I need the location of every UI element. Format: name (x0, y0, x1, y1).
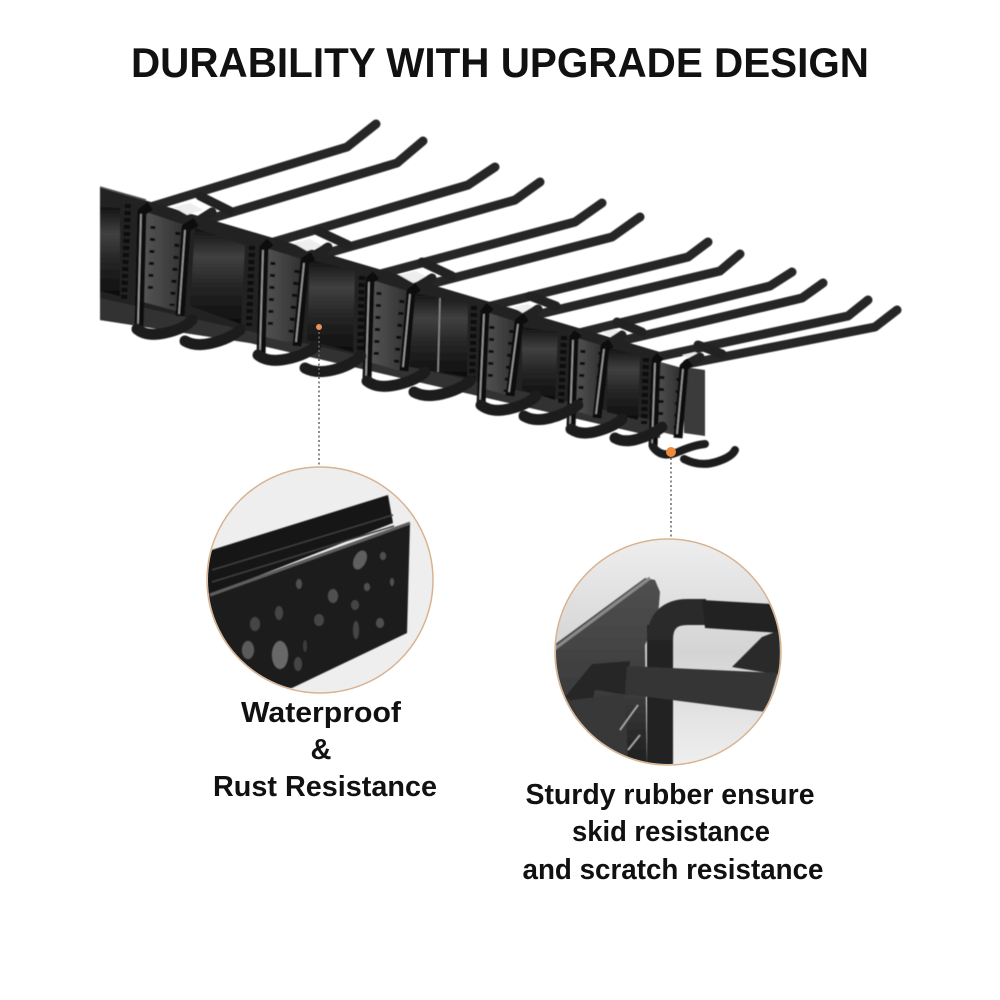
dark gaps between plates and modules (124, 204, 646, 424)
caption: waterproof: Rust Resistance (213, 771, 437, 803)
rail lower ledge (100, 298, 660, 438)
upper rubber sleeve (702, 600, 780, 633)
long upper hook arms (147, 124, 897, 364)
lower curled hooks (137, 320, 735, 464)
caption: waterproof: & (311, 734, 332, 766)
lower rubber sleeve (625, 666, 778, 712)
mesh teeth (150, 226, 679, 432)
upper hook elbow (660, 612, 706, 640)
caption: waterproof (213, 697, 437, 803)
back channel (205, 495, 393, 597)
dark wedge behind (732, 630, 780, 675)
circle photo: rubber grip (550, 539, 781, 770)
callout line: waterproof (316, 324, 322, 465)
circle photo: waterproof plate (205, 467, 433, 700)
hook bridges (193, 196, 722, 364)
vertical post (647, 625, 673, 770)
post highlights (138, 214, 683, 444)
caption: sturdy rubber: Sturdy rubber ensure (526, 779, 814, 811)
rail body (100, 187, 660, 438)
lower hook elbow (566, 661, 630, 701)
caption: waterproof: Waterproof (241, 697, 401, 729)
water droplets (242, 548, 394, 671)
slots on top of rail (173, 203, 703, 360)
slotted mesh panels (143, 212, 682, 436)
caption: sturdy rubber (522, 779, 824, 886)
caption: sturdy rubber: skid resistance (572, 816, 770, 848)
bracket plate (550, 578, 660, 770)
wire glints (620, 705, 640, 750)
callout line: rubber (666, 447, 676, 538)
top ridge highlight (100, 187, 146, 200)
plate seam (438, 298, 440, 372)
title: DURABILITY WITH UPGRADE DESIGN (131, 39, 869, 86)
front plates (100, 207, 705, 436)
caption: sturdy rubber: and scratch resistance (522, 854, 824, 886)
front plate (205, 523, 410, 700)
hook posts (139, 206, 690, 447)
product: rail with hooks (100, 124, 897, 464)
